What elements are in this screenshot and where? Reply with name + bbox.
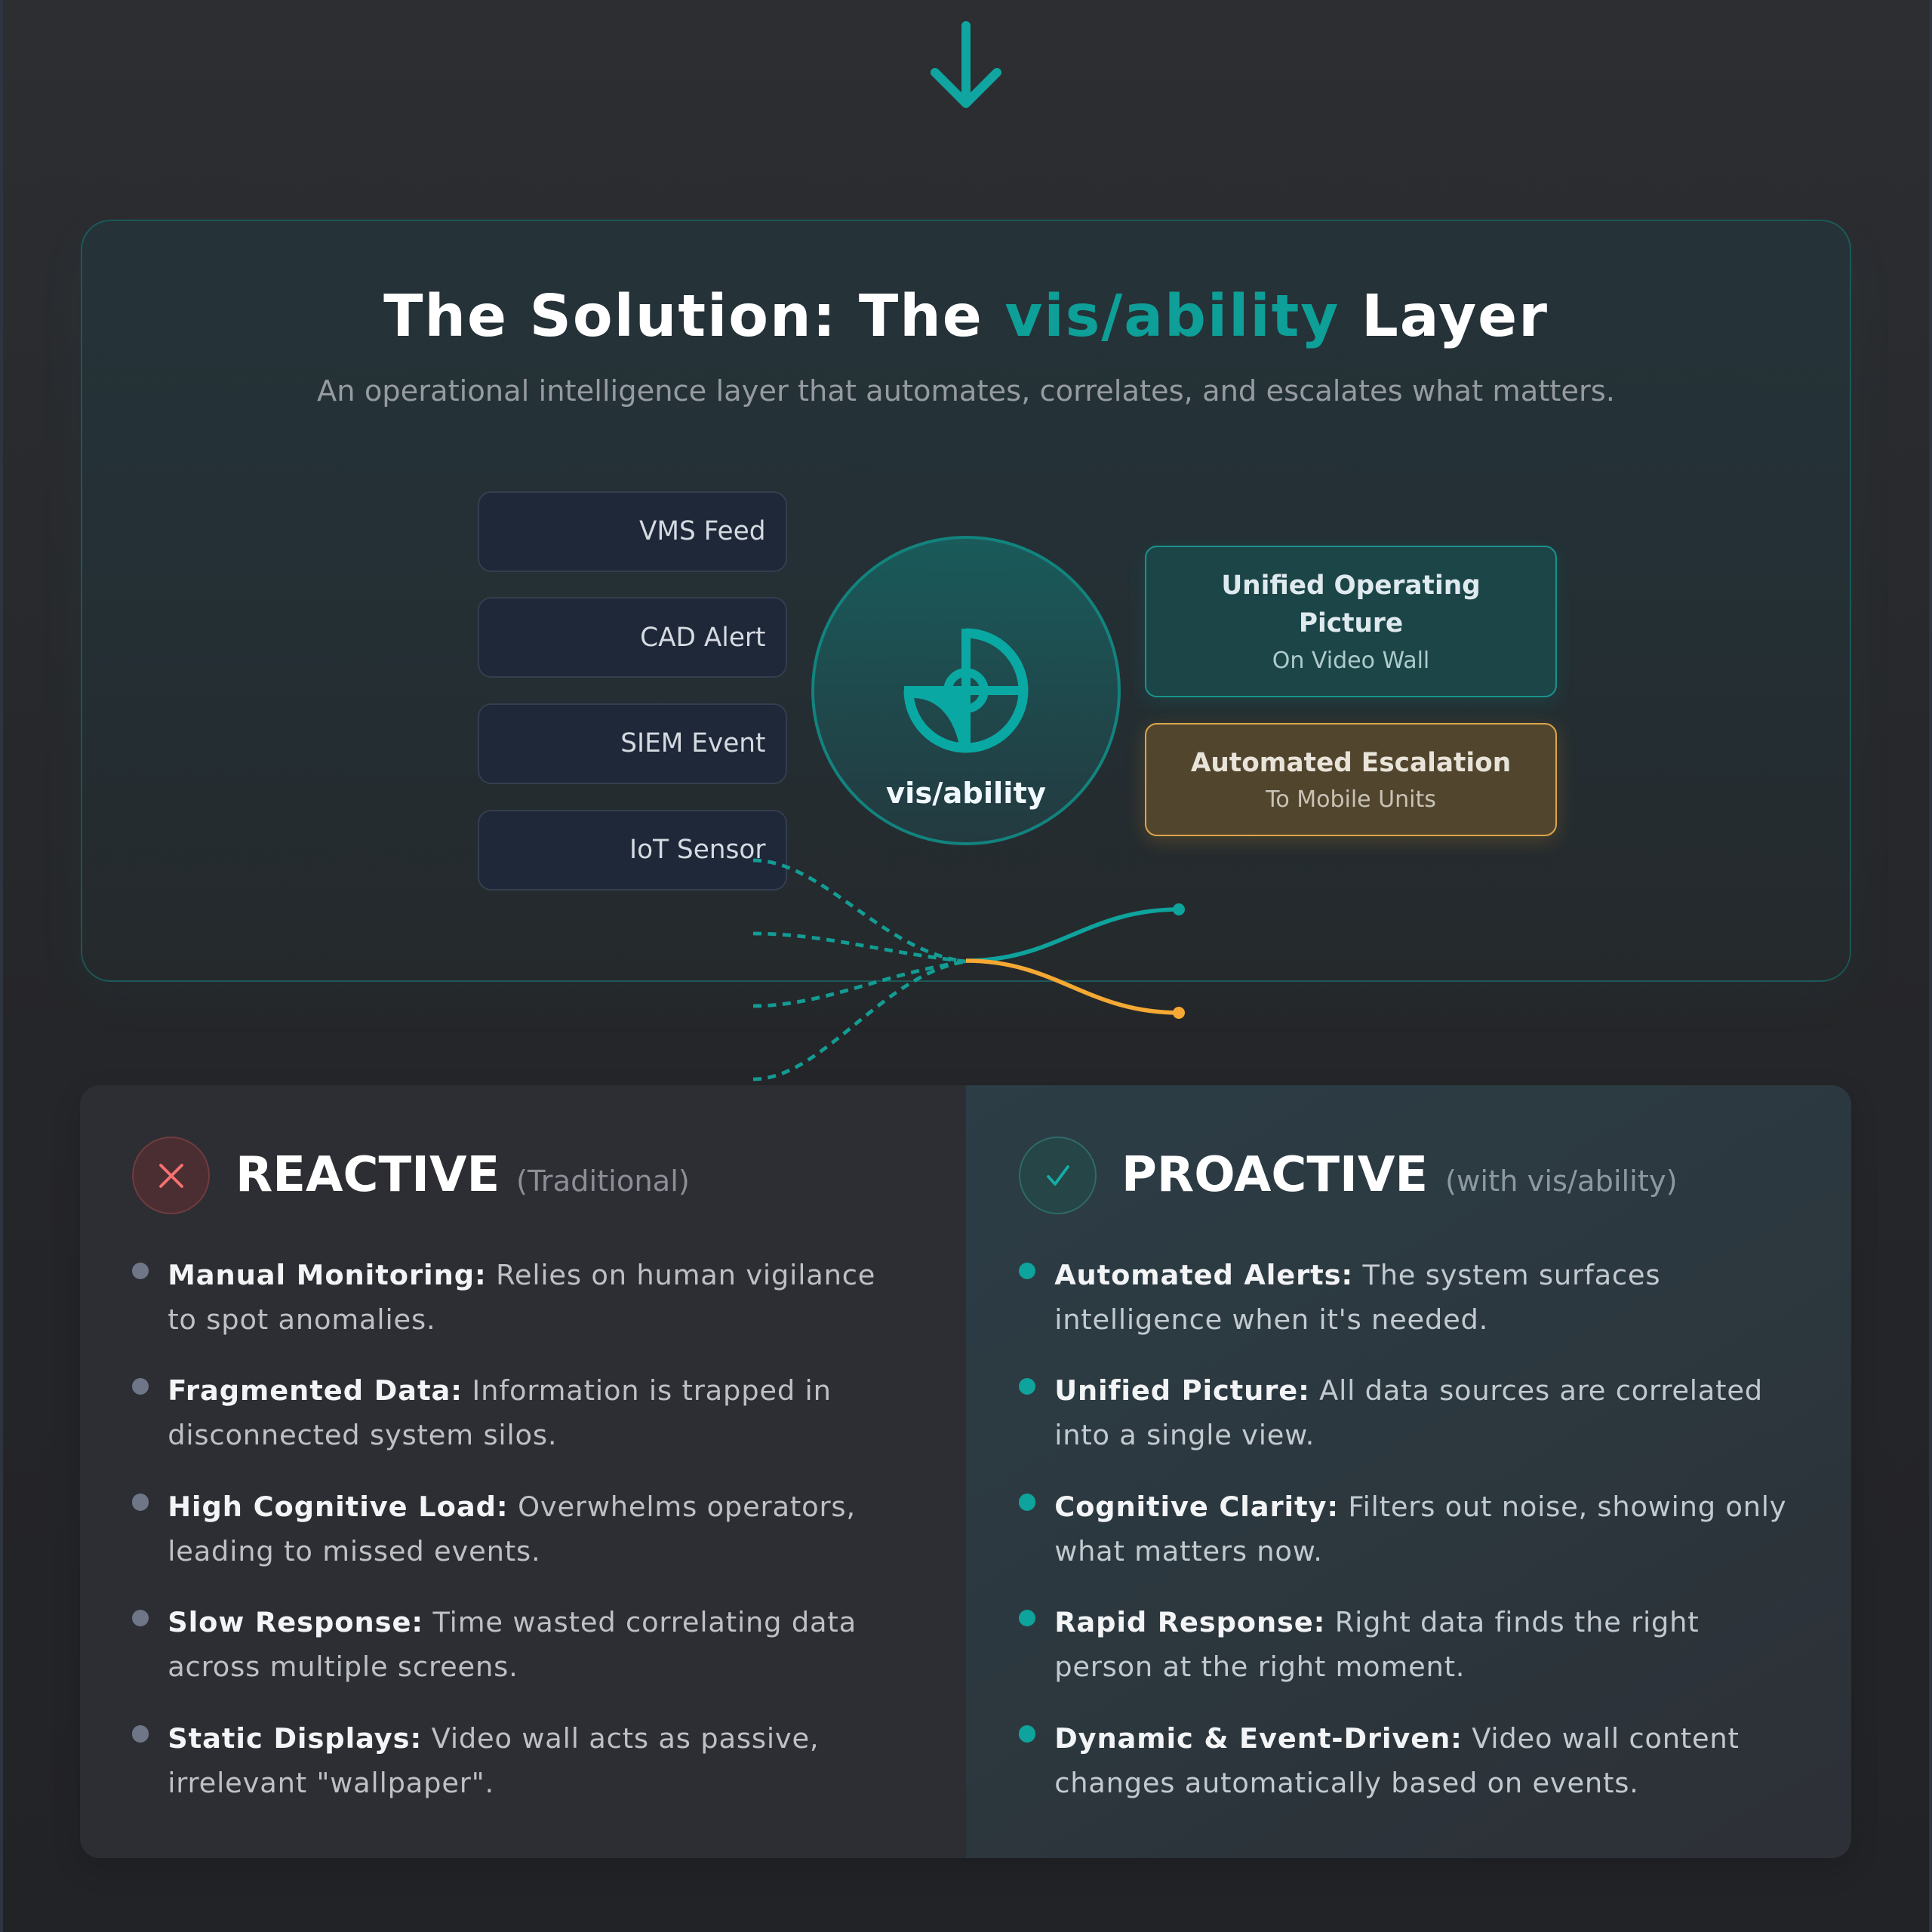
output: automated escalation: To Mobile Units <box>1266 786 1436 812</box>
input: CAD Alert <box>478 597 786 678</box>
output: automated escalation <box>1145 723 1557 836</box>
list: reactive points: Manual Monitoring: Relies on human vigilance <box>168 1259 875 1291</box>
output: automated escalation: Automated Escalation <box>1191 748 1511 778</box>
list: proactive points: what matters now. <box>1054 1535 1323 1567</box>
list: reactive points: irrelevant "wallpaper". <box>168 1767 494 1799</box>
list: reactive points: Static Displays: Video wall acts as passive, <box>168 1722 819 1755</box>
comparison card <box>80 1085 1851 1858</box>
list: reactive points <box>132 1259 875 1799</box>
list: proactive points: Cognitive Clarity: Filters out noise, showing only <box>1054 1491 1786 1523</box>
column: reactive <box>80 1085 966 1858</box>
input: CAD Alert: CAD Alert <box>640 622 765 652</box>
list: proactive points: intelligence when it's needed. <box>1054 1303 1488 1336</box>
list: reactive points: to spot anomalies. <box>168 1303 435 1336</box>
list: proactive points: into a single view. <box>1054 1419 1315 1451</box>
connectors: inputs to outputs <box>753 859 1185 1081</box>
input: IoT Sensor <box>478 809 786 891</box>
output: unified operating picture: On Video Wall <box>1272 648 1429 674</box>
list: proactive points: Dynamic & Event-Driven: Video wall content <box>1054 1722 1740 1755</box>
input: VMS Feed <box>478 491 786 572</box>
heading: reactive: REACTIVE <box>235 1147 500 1203</box>
input: SIEM Event <box>478 703 786 783</box>
list: reactive points: leading to missed events. <box>168 1535 540 1567</box>
list: reactive points: High Cognitive Load: Overwhelms operators, <box>168 1491 856 1523</box>
subtitle: An operational intelligence layer that automates, correlates, and escalates what matters. <box>317 374 1615 408</box>
hub circle <box>811 536 1121 845</box>
list: reactive points: Slow Response: Time wasted correlating data <box>168 1606 857 1638</box>
title: The Solution: The vis/ability Layer <box>383 283 1549 350</box>
list: reactive points: across multiple screens. <box>168 1651 518 1683</box>
list: proactive points: person at the right moment. <box>1054 1651 1465 1683</box>
input: IoT Sensor: IoT Sensor <box>629 835 765 865</box>
icon: vis/ability logo <box>904 628 1028 753</box>
list: reactive points: Fragmented Data: Information is trapped in <box>168 1374 832 1407</box>
panel: solution layer <box>81 220 1851 982</box>
list: reactive points: disconnected system silos. <box>168 1419 557 1451</box>
list: proactive points: Rapid Response: Right data finds the right <box>1054 1606 1699 1638</box>
icon: check <box>1019 1137 1097 1214</box>
output: unified operating picture: Unified Operating <box>1221 571 1481 601</box>
list: proactive points: changes automatically based on events. <box>1054 1767 1639 1799</box>
heading: proactive: PROACTIVE <box>1121 1147 1428 1203</box>
output: unified operating picture <box>1145 546 1557 697</box>
heading note: (Traditional) <box>516 1164 690 1198</box>
list: proactive points <box>1019 1259 1786 1799</box>
list: proactive points: Automated Alerts: The system surfaces <box>1054 1259 1660 1291</box>
arrow: down <box>931 21 1001 108</box>
output: unified operating picture: Picture <box>1299 608 1403 638</box>
hub label: vis/ability <box>886 777 1046 811</box>
input: VMS Feed: VMS Feed <box>639 516 765 546</box>
list: proactive points: Unified Picture: All data sources are correlated <box>1054 1374 1763 1407</box>
icon: cross <box>132 1137 210 1214</box>
column: proactive <box>966 1085 1851 1858</box>
input: SIEM Event: SIEM Event <box>620 728 765 758</box>
heading note: (with vis/ability) <box>1445 1164 1678 1198</box>
